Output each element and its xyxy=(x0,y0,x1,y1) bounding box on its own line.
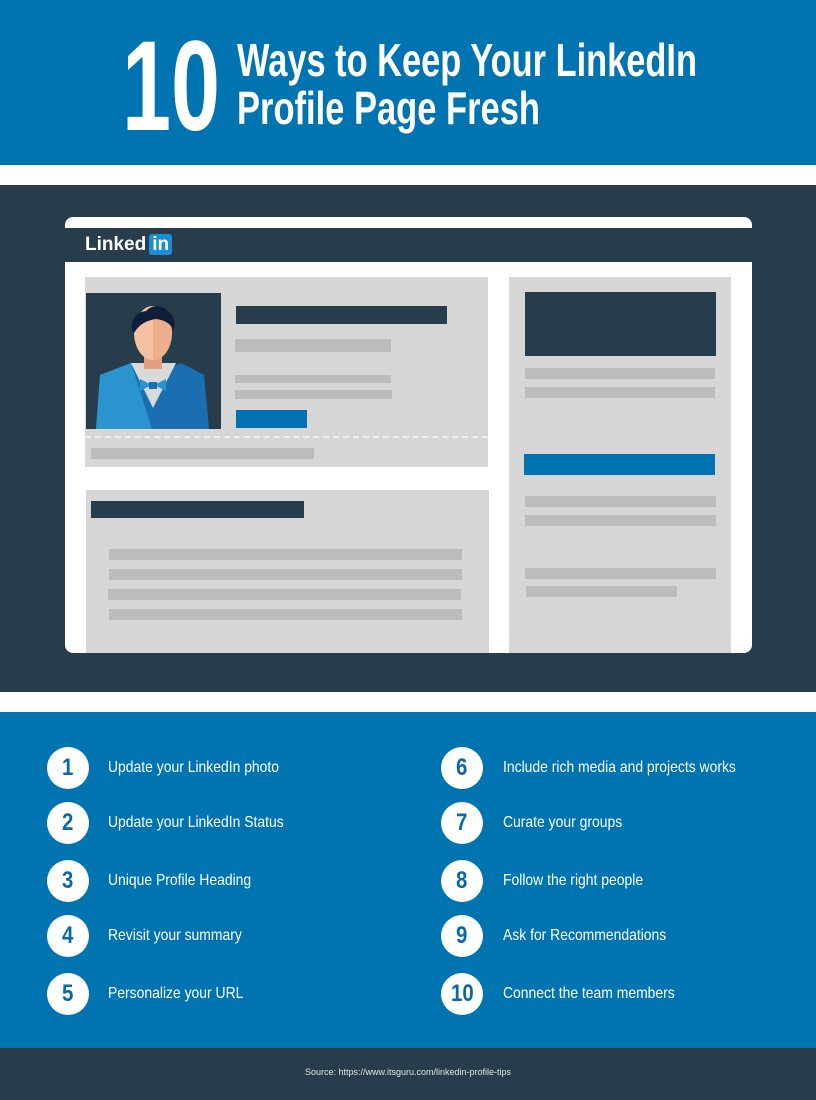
tip 3: 3 xyxy=(62,867,74,894)
tip 1: Update your LinkedIn photo xyxy=(108,759,279,776)
header xyxy=(0,0,816,165)
tip 10: Connect the team members xyxy=(503,985,675,1002)
title xyxy=(122,15,697,158)
footer source: Source: https://www.itsguru.com/linkedin-profile-tips xyxy=(305,1067,511,1077)
tip 1 xyxy=(47,747,279,789)
tip 2 xyxy=(47,802,284,844)
tips list xyxy=(0,712,816,1048)
tip 2: 2 xyxy=(62,809,74,836)
tip 10 xyxy=(441,973,675,1015)
tip 9: 9 xyxy=(456,922,468,949)
tip 8: Follow the right people xyxy=(503,872,643,889)
tip 3 xyxy=(47,860,251,902)
tip 3: Unique Profile Heading xyxy=(108,872,251,889)
footer source xyxy=(0,1048,816,1100)
tip 6: Include rich media and projects works xyxy=(503,759,736,776)
tip 10: 10 xyxy=(451,980,473,1007)
tip 8 xyxy=(441,860,643,902)
profile panel xyxy=(85,277,488,467)
tip 5 xyxy=(47,973,243,1015)
tip 4: Revisit your summary xyxy=(108,927,242,944)
tip 7: Curate your groups xyxy=(503,814,622,831)
tip 9 xyxy=(441,915,666,957)
avatar xyxy=(86,293,221,429)
tip 6 xyxy=(441,747,736,789)
tip 7 xyxy=(441,802,622,844)
tip 5: Personalize your URL xyxy=(108,985,243,1002)
tip 1: 1 xyxy=(62,754,74,781)
profile mockup section xyxy=(0,185,816,692)
tip 4: 4 xyxy=(62,922,74,949)
tip 2: Update your LinkedIn Status xyxy=(108,814,284,831)
browser card xyxy=(65,217,752,653)
tip 6: 6 xyxy=(456,754,468,781)
title: 10 xyxy=(122,15,220,158)
tip 8: 8 xyxy=(456,867,468,894)
tip 7: 7 xyxy=(456,809,468,836)
linkedin bar xyxy=(65,228,752,262)
title: Profile Page Fresh xyxy=(237,82,540,134)
summary panel xyxy=(86,490,489,653)
tip 9: Ask for Recommendations xyxy=(503,927,666,944)
linkedin logo: Linked in xyxy=(85,234,169,255)
tip 5: 5 xyxy=(62,980,74,1007)
sidebar panel xyxy=(509,277,731,653)
tip 4 xyxy=(47,915,242,957)
